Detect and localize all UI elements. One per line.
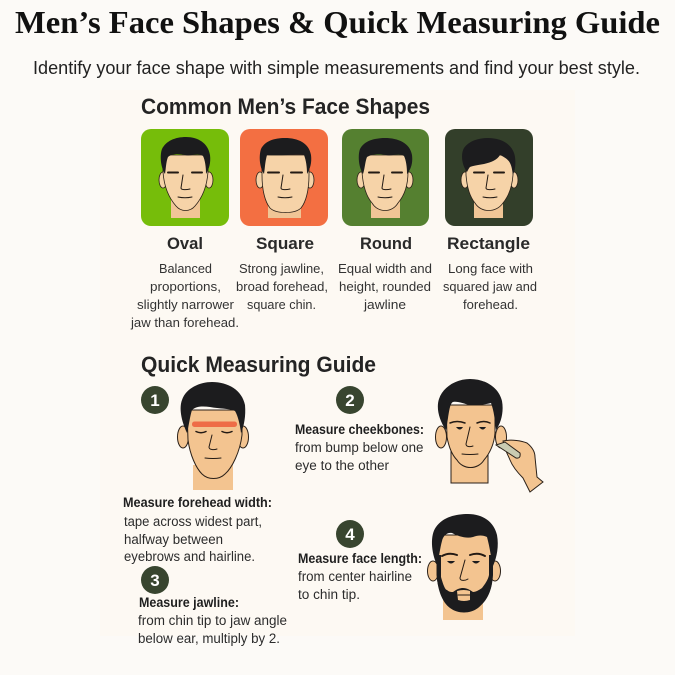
step 4 badge	[336, 520, 364, 548]
step 3 text: from chin tip to jaw angle	[138, 613, 287, 628]
step 3 badge	[141, 566, 169, 594]
description: rectangle	[443, 261, 537, 312]
step 1 badge: 1	[150, 391, 160, 410]
description: oval: slightly narrower	[137, 297, 235, 312]
step 3 text: below ear, multiply by 2.	[138, 631, 280, 646]
step 4 text: to chin tip.	[298, 587, 360, 602]
description: oval: Balanced	[159, 261, 212, 276]
panel: oval face shape	[130, 129, 239, 330]
title: Men’s Face Shapes & Quick Measuring Guide	[15, 4, 660, 40]
description: square: Strong jawline,	[239, 261, 324, 276]
description: rectangle: Long face with	[448, 261, 533, 276]
description: rectangle: forehead.	[463, 297, 518, 312]
step 3 badge: 3	[150, 571, 160, 590]
label: round: Round	[360, 235, 412, 253]
step 3 text	[138, 595, 287, 646]
panel: round face shape	[338, 129, 432, 312]
description: rectangle: squared jaw and	[443, 279, 537, 294]
forehead tape band	[192, 422, 237, 427]
label: oval: Oval	[167, 235, 203, 253]
description: oval: jaw than forehead.	[130, 315, 239, 330]
icon: rectangle face tile	[445, 129, 533, 226]
step 1 text: halfway between	[124, 532, 223, 547]
icon: round face tile	[342, 129, 429, 226]
step 1 badge	[141, 386, 169, 414]
description: square	[236, 261, 328, 312]
step 3 text: Measure jawline:	[139, 595, 239, 610]
step 2 badge: 2	[345, 391, 355, 410]
icon: oval face tile	[141, 129, 229, 226]
step 4 badge: 4	[345, 525, 355, 544]
panel: square face shape	[236, 129, 328, 312]
heading: common face shapes: Common Men’s Face Shapes	[141, 94, 430, 119]
description: oval: proportions,	[150, 279, 221, 294]
icon: forehead measuring face	[178, 382, 248, 490]
step 2 badge	[336, 386, 364, 414]
label: rectangle: Rectangle	[447, 235, 530, 253]
description: round: jawline	[363, 297, 406, 312]
heading: quick measuring guide: Quick Measuring Guide	[141, 352, 376, 377]
label: square: Square	[256, 235, 314, 253]
icon: face length bearded face	[428, 514, 500, 620]
step 1 text: eyebrows and hairline.	[124, 549, 255, 564]
step 1 text: tape across widest part,	[124, 514, 262, 529]
step 1 text: Measure forehead width:	[123, 495, 272, 510]
icon: square face tile	[240, 129, 328, 226]
step 2 text: from bump below one	[295, 440, 424, 455]
step 2 text	[295, 422, 424, 473]
step 4 text: from center hairline	[298, 569, 412, 584]
icon: cheekbone measuring face with hand	[436, 379, 543, 492]
description: round: height, rounded	[339, 279, 431, 294]
panel: rectangle face shape	[443, 129, 537, 312]
step 2 text: Measure cheekbones:	[295, 422, 424, 437]
step 2 text: eye to the other	[295, 458, 389, 473]
step 1 text	[123, 495, 272, 564]
hand holding tape	[503, 440, 543, 492]
description: square: broad forehead,	[236, 279, 328, 294]
description: oval	[130, 261, 239, 330]
step 4 text	[298, 551, 422, 602]
description: round: Equal width and	[338, 261, 432, 276]
subtitle: Identify your face shape with simple measurements and find your best style.	[33, 58, 640, 78]
step 4 text: Measure face length:	[298, 551, 422, 566]
description: round	[338, 261, 432, 312]
description: square: square chin.	[247, 297, 316, 312]
panel: content card	[100, 90, 575, 636]
